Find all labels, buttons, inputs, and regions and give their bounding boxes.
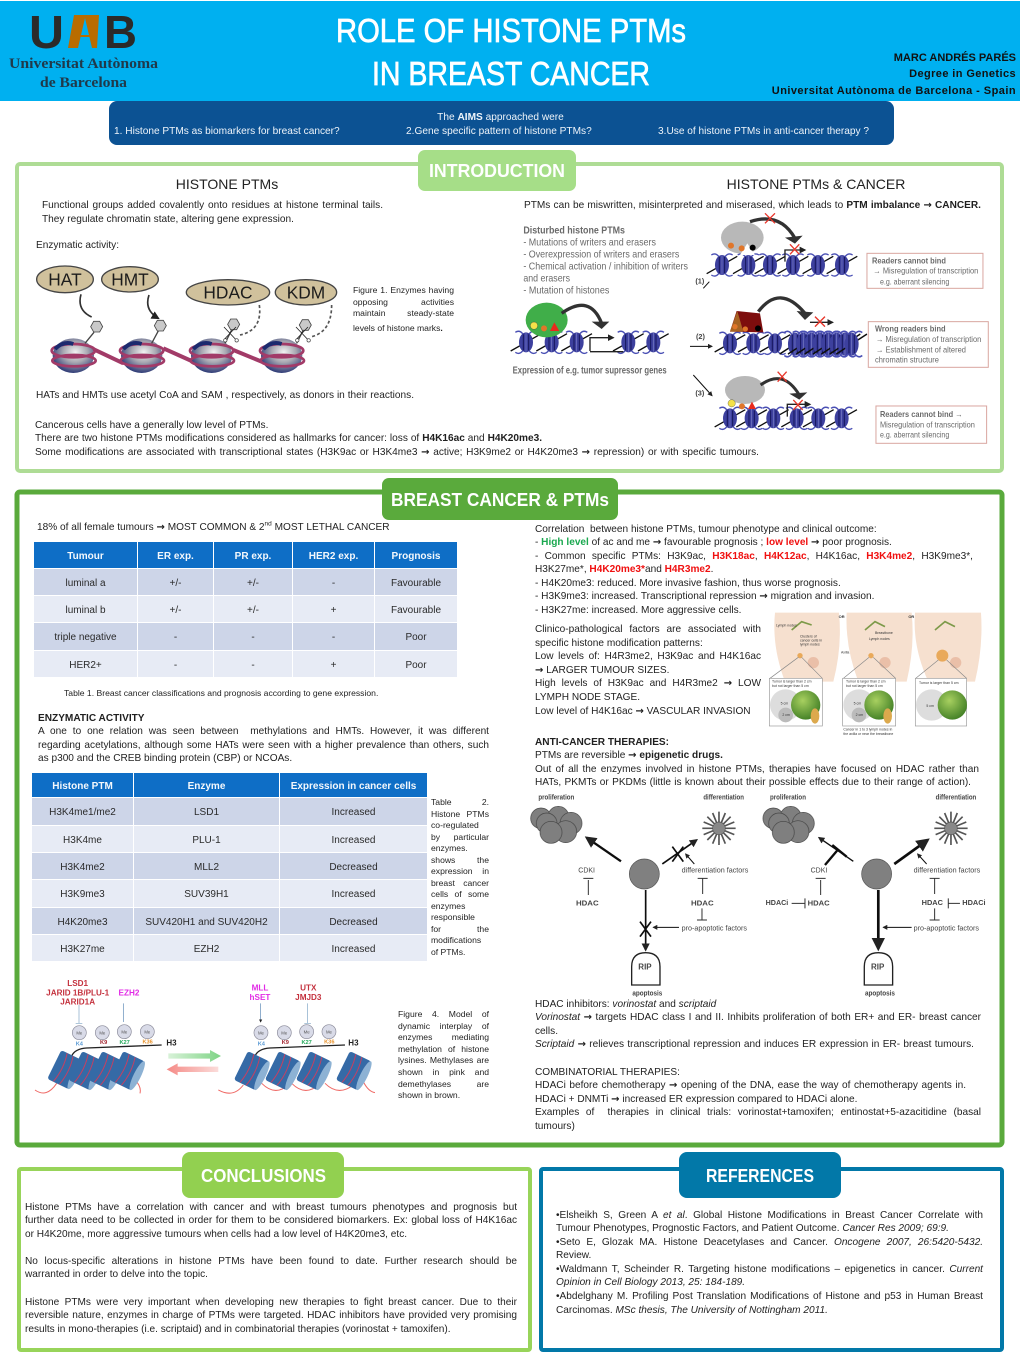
text: correlation list <box>535 524 973 616</box>
figure 5: methylation dynamics on H3: Me <box>99 1030 106 1035</box>
text: conclusions: warranted in order to delve into the topic. <box>25 1269 208 1280</box>
aims text: 3.Use of histone PTMs in anti-cancer therapy ? <box>658 126 869 137</box>
text: combinatorial therapies: HDACi + DNMTi → increased ER expression compared to HDACi alone. <box>535 1094 857 1105</box>
text: combinatorial therapies: HDACi before chemotherapy → opening of the DNA, ease the way of chemotherapy agents in. <box>535 1080 966 1091</box>
text: PTM imbalance: PTMs can be miswritten, misinterpreted and miserased, which leads to PTM imbalance → CANCER. <box>524 200 981 211</box>
author block <box>772 51 1016 97</box>
table 2: enzymes and expression: H4K20me3 <box>57 916 108 928</box>
text: conclusions: further data need to be collected in order for them to be considered biomarkers. Ex: global loss of H4K16ac <box>25 1215 517 1226</box>
text: references: Opinion in Cell Biology 2013, 25: 184-189. <box>556 1277 745 1288</box>
table 1: breast cancer classification: - <box>251 632 255 643</box>
figure 3: tumour size illustration: 5 cm <box>854 702 861 706</box>
figure 5: methylation dynamics on H3: K27 <box>301 1040 312 1046</box>
text: correlation list: H3K27me*, H4K20me3*and H4R3me2. <box>535 564 713 575</box>
right diagram: RIP <box>871 962 885 971</box>
figure 3: tumour size illustration: lymph nodes <box>800 642 820 646</box>
figure 5: methylation dynamics on H3: Me <box>281 1030 288 1035</box>
table 1: breast cancer classification: - <box>174 660 177 670</box>
figure 5: methylation dynamics on H3: MLL <box>252 984 268 993</box>
table 1: breast cancer classification: Favourable <box>391 604 441 616</box>
right diagram: HDAC <box>808 901 830 908</box>
text: HDAC inhibitors: Scriptaid → relieves transcriptional repression and induces ER expression in ER- breast tumours. <box>535 1039 974 1050</box>
caption: figure 4: shown in pink and <box>398 1067 489 1077</box>
figure 2: disturbed histone PTMs: → Establishment of altered <box>876 344 966 354</box>
figure 3: tumour size illustration <box>769 613 981 736</box>
figure 5: methylation dynamics on H3: K9 <box>100 1040 107 1046</box>
right diagram: differentiation <box>936 794 976 801</box>
figure 2: disturbed histone PTMs: chromatin structure <box>875 354 939 364</box>
right diagram: HDACi <box>766 900 788 907</box>
text: clinico-pathological factors: → LARGER TUMOUR SIZES. <box>535 665 669 676</box>
figure 5: methylation dynamics on H3: Me <box>326 1029 333 1034</box>
left diagram: HDAC <box>576 901 599 908</box>
text: enzymatic activity: Enzymatic activity: <box>36 240 119 251</box>
text: HDAC inhibitors: HDAC inhibitors: vorinostat and scriptaid <box>535 998 716 1010</box>
figure 2: disturbed histone PTMs: - Mutations of writers and erasers <box>523 238 656 249</box>
table 1: breast cancer classification: triple negative <box>54 632 117 643</box>
table 1: breast cancer classification: - <box>332 578 335 588</box>
figure 2: disturbed histone PTMs: Expression of e.g. tumor supressor genes <box>513 366 667 377</box>
panel: references: REFERENCES <box>706 1165 814 1186</box>
figure 1: enzymes on nucleosomes: HDAC <box>203 282 253 302</box>
table 2: enzymes and expression: H3K27me <box>60 944 105 954</box>
figure 3: tumour size illustration: 5 cm <box>926 704 934 708</box>
caption: table 2: expression in <box>431 866 489 876</box>
figure 5: methylation dynamics on H3: hSET <box>250 993 270 1002</box>
table 1: breast cancer classification: HER2 exp. <box>309 550 358 562</box>
caption: figure 1: opposing activities <box>353 297 454 307</box>
figure 3: tumour size illustration: Clusters of <box>800 634 817 638</box>
figure 3: tumour size illustration: 5 cm <box>781 702 788 706</box>
text: HDAC inhibitors: cells. <box>535 1026 558 1037</box>
left diagram: differentiation <box>703 794 744 801</box>
text: anti-cancer therapies: Out of all the enzymes involved in histone PTMs, therapies have focused on HDAC rather than <box>535 764 979 775</box>
title <box>336 12 686 92</box>
caption: figure 4: dynamic interplay of <box>398 1021 489 1031</box>
figure 3: tumour size illustration: 2 cm <box>856 713 863 717</box>
figure 3: tumour size illustration: OR <box>908 614 914 619</box>
figure 3: tumour size illustration: Cancer in 1 to 3 lymph nodes in <box>843 728 892 732</box>
right diagram: CDKI <box>811 868 827 875</box>
figure 3: tumour size illustration: Tumor is larger than 2 cm <box>846 680 886 684</box>
caption: table 2: Histone PTMs <box>431 808 489 818</box>
aims text: 2.Gene specific pattern of histone PTMs? <box>406 126 592 137</box>
header band <box>0 1 1020 101</box>
table 2: enzymes and expression: Increased <box>332 807 375 818</box>
left diagram: RIP <box>638 962 652 971</box>
table 1: breast cancer classification: +/- <box>247 604 259 616</box>
caption: table 2: for the <box>431 924 489 934</box>
text: anti-cancer therapies: PTMs are reversible → epigenetic drugs. <box>535 750 723 761</box>
caption: table 2: enzymes <box>431 900 465 910</box>
panel: conclusions: CONCLUSIONS <box>201 1165 326 1186</box>
text: conclusions: reversible nature, enzymes in charge of PTMs were targeted. HDAC inhibitors have provided very promising <box>25 1310 517 1321</box>
text: enzymatic activity section: ENZYMATIC ACTIVITY <box>38 712 145 724</box>
author block: Universitat Autònoma de Barcelona - Spain <box>772 85 1016 97</box>
caption: table 2: by particular <box>431 832 489 842</box>
figure 2: disturbed histone PTMs: - Overexpression of writers and erasers <box>523 250 679 261</box>
caption: figure 4: enzymes mediating <box>398 1032 489 1042</box>
figure 5: methylation dynamics on H3: Me <box>304 1029 310 1034</box>
logo: UAB: de Barcelona <box>40 75 128 91</box>
aims text <box>114 112 869 137</box>
caption: figure 4 <box>398 1009 490 1100</box>
text: references: •Abdelghany M. Profiling Post Translation Modifications of Histone and p53 in Human Breast <box>556 1291 983 1302</box>
text: correlation list: - H3K9me3: increased. Transcriptional repression → migration and invasion. <box>535 591 874 602</box>
text: references: Tumour Phenotypes, Prognostic Factors, and Patient Outcome. Cancer Res 2009; 69:9. <box>556 1223 949 1234</box>
caption: table 2: enzymes. <box>431 843 468 853</box>
caption: table 2: of PTMs. <box>431 946 465 956</box>
text: enzymatic activity section: regarding acetylations, although some HATs were seen with a higher prevalence than others, such <box>38 740 489 751</box>
caption: table 1: Table 1. Breast cancer classifications and prognosis according to gene expression. <box>64 688 378 698</box>
figure 5: methylation dynamics on H3: Me <box>144 1029 151 1034</box>
caption: table 2: Table 2. <box>431 797 489 807</box>
text: anti-cancer therapies: ANTI-CANCER THERAPIES: <box>535 736 669 748</box>
table 1: breast cancer classification: + <box>331 604 336 616</box>
figure 5: methylation dynamics on H3: JARID 1B/PLU-1 <box>46 988 110 997</box>
figure 5: methylation dynamics on H3: H3 <box>166 1039 177 1048</box>
logo: UAB: U <box>29 6 64 58</box>
table 2: enzymes and expression: Increased <box>332 834 375 846</box>
panel: conclusions <box>19 1152 530 1350</box>
table 1: breast cancer classification: - <box>174 632 177 643</box>
text: clinico-pathological factors: Clinico-pathological factors are associated with <box>535 624 761 635</box>
row one <box>695 213 857 288</box>
figure 3: tumour size illustration: the axilla or near the breastbone <box>843 732 893 736</box>
aims text: The AIMS approached were <box>437 112 564 123</box>
figure 3: tumour size illustration: cancer cells in <box>800 638 822 642</box>
figure 5: methylation dynamics on H3: H3 <box>348 1039 359 1048</box>
text: references: •Waldmann T, Scheinder R. Targeting histone modifications – epigenetics in cancer. Current <box>556 1264 983 1275</box>
text: references: •Seto E, Glozak MA. Histone Deacetylases and Cancer. Oncogene 2007, 26:5420-5432. <box>556 1237 983 1248</box>
text: correlation list: Correlation between histone PTMs, tumour phenotype and clinical outcome: <box>535 524 877 534</box>
text: HDAC inhibitors <box>535 998 981 1050</box>
text: enzymatic activity section: A one to one relation was seen between methylations and HMTs. However, it was different <box>38 726 489 737</box>
caption: figure 1: levels of histone marks. <box>353 323 443 333</box>
figure 3: tumour size illustration: Lymph nodes <box>776 624 797 628</box>
figure 3: tumour size illustration: Breastbone <box>875 631 893 635</box>
text: hallmarks: Some modifications are associated with transcriptional states (H3K9ac or H3K4me3 → active; H3K9me2 or H4K20me3 → repression) or with specific tumours. <box>35 447 759 458</box>
figure 5: methylation dynamics on H3 <box>35 979 375 1093</box>
table 2: enzymes and expression: Enzyme <box>188 780 225 792</box>
figure 5: methylation dynamics on H3: K4 <box>76 1042 84 1048</box>
text: correlation list: - High level of ac and me → favourable prognosis ; low level → poor prognosis. <box>535 537 892 548</box>
figure 5: methylation dynamics on H3: LSD1 <box>67 979 89 988</box>
heading: histone PTMs: HISTONE PTMs <box>176 176 278 192</box>
figure 1: enzymes on nucleosomes: HAT <box>48 269 82 289</box>
table 1: breast cancer classification: - <box>251 660 255 670</box>
panel: references <box>541 1152 1002 1350</box>
table 2: enzymes and expression: H3K4me <box>63 834 102 846</box>
text: combinatorial therapies: Examples of therapies in clinical trials: vorinostat+tamoxifen; entinostat+5-azacitidine (basal <box>535 1107 981 1118</box>
right diagram: HDAC <box>922 900 943 907</box>
table 1: breast cancer classification: luminal a <box>65 578 106 588</box>
caption: figure 1: maintain steady-state <box>353 308 454 318</box>
left diagram: differentiation factors <box>682 868 749 875</box>
text: anti-cancer therapies: HATs, PKMTs or PKDMs (little is known about their possible effects due to their range of action). <box>535 777 971 788</box>
table 2: enzymes and expression: Increased <box>332 889 375 900</box>
figure 4: HDAC inhibitor pathways <box>531 794 986 998</box>
table 1: breast cancer classification: + <box>331 660 336 670</box>
right diagram: apoptosis <box>865 991 895 998</box>
table 1: breast cancer classification: Poor <box>405 660 427 670</box>
text: conclusions <box>25 1202 517 1335</box>
table 2: enzymes and expression: SUV420H1 and SUV420H2 <box>145 916 268 928</box>
figure 5: methylation dynamics on H3: K36 <box>142 1040 153 1046</box>
caption: table 2 <box>431 797 489 956</box>
caption: figure 1: Figure 1. Enzymes having <box>353 285 454 295</box>
table 2: enzymes and expression: Histone PTM <box>52 780 113 792</box>
figure 2: disturbed histone PTMs: → Misregulation of transcription <box>873 266 979 276</box>
table 1: breast cancer classification: +/- <box>170 604 181 616</box>
text: correlation list: - Common specific PTMs: H3K9ac, H3K18ac, H4K12ac, H4K16ac, H3K4me2, H3K9me3*, <box>535 551 973 562</box>
figure 3: tumour size illustration: Tumor is larger than 5 cm <box>919 681 959 685</box>
caption: figure 4: Figure 4. Model of <box>398 1009 489 1019</box>
row one: (1) <box>695 276 705 285</box>
figure 2: disturbed histone PTMs: Disturbed histone PTMs <box>523 225 625 236</box>
aims text: 1. Histone PTMs as biomarkers for breast cancer? <box>114 126 340 137</box>
caption: table 2: shows the <box>431 854 489 864</box>
caption: table 2: modifications <box>431 935 481 945</box>
figure 5: methylation dynamics on H3: Me <box>76 1030 83 1035</box>
figure 5: methylation dynamics on H3: Me <box>121 1029 128 1034</box>
row three <box>693 372 857 429</box>
title: ROLE OF HISTONE PTMs <box>336 12 686 49</box>
figure 5: methylation dynamics on H3: EZH2 <box>119 988 140 997</box>
caption: figure 4: methylation of histone <box>398 1044 489 1054</box>
text: conclusions: results in mono-therapies (i.e. scriptaid) and in combinatorial therapies (vorinostat + tamoxifen). <box>25 1324 451 1335</box>
outcome boxes <box>867 253 988 443</box>
text: hallmarks <box>35 420 759 458</box>
text: conclusions: No locus-specific alterations in histone PTMs have been found to date. Further research should be <box>25 1256 517 1267</box>
row two <box>690 298 867 357</box>
left diagram: apoptosis <box>632 991 662 998</box>
caption: figure 4: lysines. Methylases are <box>398 1055 489 1065</box>
figure 1: enzymes on nucleosomes: KDM <box>287 282 325 302</box>
figure 5: methylation dynamics on H3: Me <box>258 1030 265 1035</box>
figure 3: tumour size illustration: OR <box>839 614 845 619</box>
figure 2: disturbed histone PTMs: - Mutation of histones <box>523 286 609 297</box>
author block: MARC ANDRÉS PARÉS <box>894 52 1016 64</box>
table 1: breast cancer classification <box>34 542 457 677</box>
figure 3: tumour size illustration: but not larger than 5 cm <box>772 684 809 688</box>
text: correlation list: - H3K27me: increased. More aggressive cells. <box>535 605 741 616</box>
text: conclusions: Histone PTMs have a correlation with cancer and with breast tumours phenotypes and prognosis but <box>25 1202 517 1212</box>
text: definition: Functional groups added covalently onto residues at histone terminal tails. <box>42 200 383 211</box>
text: clinico-pathological factors: Low level of H4K16ac → VASCULAR INVASION <box>535 706 751 717</box>
table 2: enzymes and expression: Decreased <box>329 916 378 928</box>
logo: UAB <box>9 6 159 91</box>
figure 2: disturbed histone PTMs: Wrong readers bind <box>875 324 946 334</box>
text: conclusions: Histone PTMs were very important when developing new therapies to fight breast cancer. Due to their <box>25 1297 517 1308</box>
logo: UAB: Universitat Autònoma <box>9 56 159 72</box>
text: enzymatic activity section <box>38 712 489 764</box>
text: combinatorial therapies: tumours) <box>535 1121 575 1132</box>
row three: (3) <box>695 389 705 398</box>
caption: table 2: co-regulated <box>431 820 479 830</box>
figure 2: disturbed histone PTMs <box>511 213 988 443</box>
figure 3: tumour size illustration: Lymph nodes <box>869 637 890 641</box>
text: hallmarks: There are two histone PTMs modifications considered as hallmarks for cancer: loss of H4K16ac and H4K20me3. <box>35 433 542 444</box>
figure 3: tumour size illustration: Tumor is larger than 2 cm <box>772 680 812 684</box>
figure 5: methylation dynamics on H3: K9 <box>282 1040 289 1046</box>
table 2: enzymes and expression: SUV39H1 <box>184 889 229 900</box>
caption: figure 4: demethylases are <box>398 1079 489 1089</box>
text: definition: They regulate chromatin state, altering gene expression. <box>42 214 294 225</box>
left diagram: CDKI <box>578 868 595 875</box>
table 1: breast cancer classification: Favourable <box>391 578 441 588</box>
text: clinico-pathological factors <box>535 624 761 717</box>
table 2: enzymes and expression: Decreased <box>329 862 378 872</box>
figure 2: disturbed histone PTMs: e.g. aberrant silencing <box>880 276 950 286</box>
panel: introduction <box>17 150 1002 471</box>
table 1: breast cancer classification: Prognosis <box>392 550 440 562</box>
text: statistics: 18% of all female tumours → MOST COMMON & 2nd MOST LETHAL CANCER <box>37 521 390 533</box>
figure 5: methylation dynamics on H3: JARID1A <box>60 997 95 1006</box>
figure 5: methylation dynamics on H3: K36 <box>324 1040 334 1046</box>
text: donors: HATs and HMTs use acetyl CoA and SAM , respectively, as donors in their reactions. <box>36 390 414 401</box>
text: HDAC inhibitors: Vorinostat → targets HDAC class I and II. Inhibits proliferation of both ER+ and ER- breast cancer <box>535 1012 981 1023</box>
table 2: enzymes and expression: H3K4me1/me2 <box>49 807 116 818</box>
text: clinico-pathological factors: High levels of H3K9ac and H4R3me2 → LOW <box>535 678 761 689</box>
table 2: enzymes and expression: H3K4me2 <box>60 862 105 872</box>
table 2: enzymes and expression: Increased <box>332 944 375 954</box>
table 1: breast cancer classification: HER2+ <box>69 660 102 670</box>
text: clinico-pathological factors: LYMPH NODE STAGE. <box>535 692 640 703</box>
table 2: enzymes and expression <box>32 773 427 961</box>
right diagram: HDACi <box>962 900 986 907</box>
table 1: breast cancer classification: Poor <box>405 632 427 643</box>
text: references: •Elsheikh S, Green A et al. Global Histone Modifications in Breast Cancer Correlate with <box>556 1210 983 1220</box>
figure 2: disturbed histone PTMs: e.g. aberrant silencing <box>880 430 950 440</box>
figure 2: disturbed histone PTMs: Misregulation of transcription <box>880 419 975 429</box>
figure 5: methylation dynamics on H3: K4 <box>258 1042 266 1048</box>
table 2: enzymes and expression: EZH2 <box>194 944 219 954</box>
text: correlation list: - H4K20me3: reduced. More invasive fashion, thus worse prognosis. <box>535 578 841 589</box>
caption: table 2: cells of some <box>431 889 489 899</box>
figure 2: disturbed histone PTMs: - Chemical activation / inhibition of writers <box>523 262 688 273</box>
text: references: Carcinomas. MSc thesis, The University of Nottingham 2011. <box>556 1305 828 1316</box>
author block: Degree in Genetics <box>909 68 1016 80</box>
text: references: Review. <box>556 1250 591 1261</box>
left diagram <box>531 794 749 998</box>
figure 3: tumour size illustration: but not larger than 5 cm <box>846 684 883 688</box>
figure 5: methylation dynamics on H3: UTX <box>300 984 317 993</box>
figure 2: disturbed histone PTMs: → Misregulation of transcription <box>876 334 982 344</box>
text: definition <box>42 200 383 225</box>
table 1: breast cancer classification: +/- <box>247 578 259 588</box>
figure 2: disturbed histone PTMs: Readers cannot bind <box>872 256 946 266</box>
table 2: enzymes and expression: MLL2 <box>194 862 219 872</box>
table 1: breast cancer classification: +/- <box>170 578 181 588</box>
figure 5: methylation dynamics on H3: JMJD3 <box>295 993 322 1002</box>
heading: histone PTMs and cancer: HISTONE PTMs & CANCER <box>727 176 905 192</box>
figure 3: tumour size illustration: Axilla <box>841 650 849 654</box>
logo: UAB: B <box>104 6 137 58</box>
table 1: breast cancer classification: PR exp. <box>235 550 271 562</box>
figure 3: tumour size illustration: 2 cm <box>782 713 790 717</box>
text: clinico-pathological factors: Low levels of: H4R3me2, H3K9ac and H4K16ac <box>535 651 761 662</box>
caption: figure 4: shown in brown. <box>398 1090 460 1100</box>
right diagram: proliferation <box>770 794 806 801</box>
text: conclusions: or H4K20me, more aggressive tumours when cells had a low level of H4K20me3, etc. <box>25 1229 407 1240</box>
table 2: enzymes and expression: H3K9me3 <box>60 889 105 900</box>
text: combinatorial therapies: COMBINATORIAL THERAPIES: <box>535 1066 680 1078</box>
text: clinico-pathological factors: specific histone modification patterns: <box>535 638 703 649</box>
table 2: enzymes and expression: LSD1 <box>194 807 219 818</box>
left diagram: proliferation <box>538 794 574 801</box>
title: IN BREAST CANCER <box>372 55 650 92</box>
table 1: breast cancer classification: Tumour <box>67 550 104 562</box>
figure 1: enzymes on nucleosomes <box>37 266 337 373</box>
panel: introduction: INTRODUCTION <box>429 161 565 181</box>
table 1: breast cancer classification: ER exp. <box>157 550 194 562</box>
figure 2: disturbed histone PTMs: and erasers <box>523 274 570 285</box>
panel: breast cancer and PTMs: BREAST CANCER & PTMs <box>391 490 609 510</box>
figure 2: disturbed histone PTMs: Readers cannot bind → <box>880 409 963 419</box>
left diagram: HDAC <box>691 901 714 908</box>
text: anti-cancer therapies <box>535 736 979 788</box>
caption: table 2: breast cancer <box>431 878 489 888</box>
text: references <box>556 1210 984 1316</box>
panel: breast cancer and PTMs <box>17 478 1002 1145</box>
text: combinatorial therapies <box>535 1066 981 1132</box>
text: hallmarks: Cancerous cells have a generally low level of PTMs. <box>35 420 268 430</box>
aims box background <box>109 101 894 145</box>
table 2: enzymes and expression: PLU-1 <box>192 834 221 846</box>
left diagram: pro-apoptotic factors <box>682 926 747 933</box>
figure 5: methylation dynamics on H3: K27 <box>119 1040 130 1046</box>
right diagram: pro-apoptotic factors <box>914 926 979 933</box>
caption: figure 1 <box>353 285 454 333</box>
table 1: breast cancer classification: - <box>332 632 335 643</box>
row two: (2) <box>696 332 705 341</box>
right diagram <box>763 794 986 998</box>
caption: table 2: responsible <box>431 912 475 922</box>
right diagram: differentiation factors <box>914 868 981 875</box>
text: enzymatic activity section: as p300 and the CREB binding protein (CBP) or NCOAs. <box>38 753 292 764</box>
table 2: enzymes and expression: Expression in cancer cells <box>291 780 416 792</box>
figure 1: enzymes on nucleosomes: HMT <box>111 269 149 289</box>
table 1: breast cancer classification: luminal b <box>65 604 106 616</box>
